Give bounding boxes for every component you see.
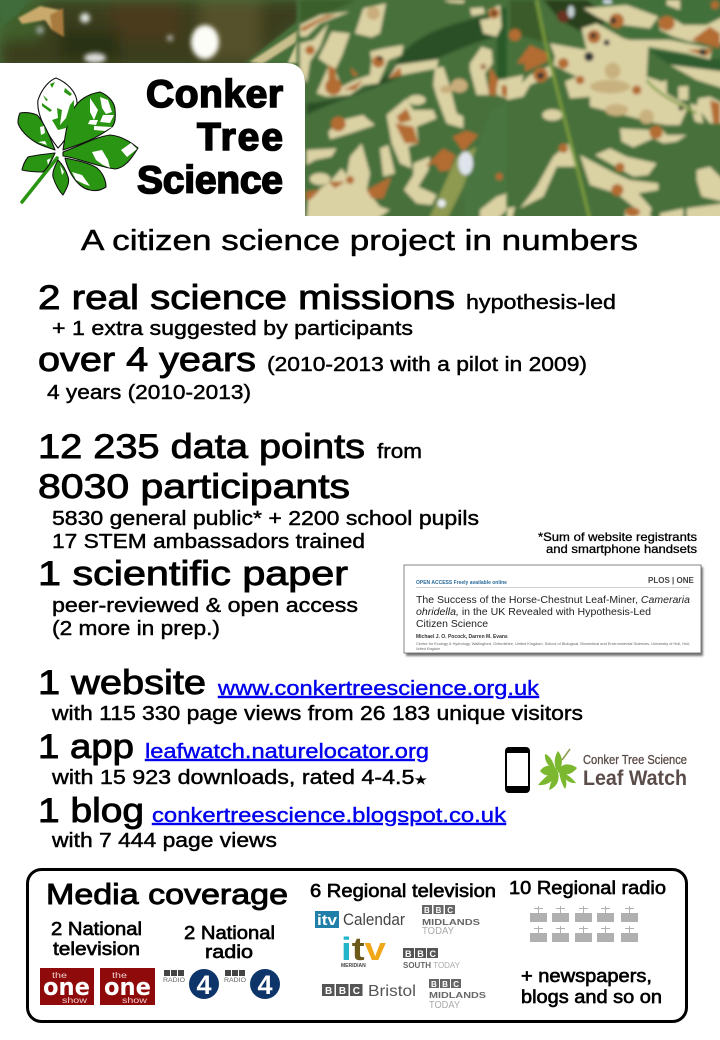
block: website: 1 website bbox=[38, 664, 206, 702]
paper thumbnail: Citizen Science bbox=[416, 619, 488, 630]
title: A citizen science project in numbers bbox=[81, 225, 638, 257]
national television: 2 National bbox=[51, 918, 142, 939]
block: data points and participants: 5830 general public* + 2200 school pupils bbox=[52, 508, 479, 530]
national radio: 4 bbox=[196, 970, 212, 1000]
icon: smartphone bbox=[505, 747, 530, 793]
paper thumbnail: Centre for Ecology & Hydrology, Wallingford, Oxfordshire, United Kingdom, School of Biological, Biomedical and Environmental Sciences, University of Hull, Hull, bbox=[416, 642, 690, 646]
newspapers and blogs note: + newspapers, bbox=[521, 965, 652, 986]
block: data points and participants bbox=[38, 428, 479, 553]
logo panel bbox=[0, 63, 305, 216]
logo wordmark: Conker bbox=[146, 73, 283, 116]
block: years bbox=[38, 341, 587, 404]
block: website: www.conkertreescience.org.uk bbox=[217, 678, 540, 700]
national television: show bbox=[62, 995, 88, 1005]
regional television: SOUTH TODAY bbox=[403, 960, 460, 970]
block: scientific paper: peer-reviewed & open access bbox=[52, 595, 358, 617]
block: data points and participants: from bbox=[377, 441, 422, 463]
block: blog: with 7 444 page views bbox=[51, 830, 277, 852]
logo wordmark: Tree bbox=[197, 116, 283, 159]
national radio bbox=[163, 922, 280, 1000]
regional television: B B C bbox=[431, 980, 459, 989]
block: years: (2010-2013 with a pilot in 2009) bbox=[267, 354, 587, 376]
panel: media coverage bbox=[28, 870, 686, 1022]
footnote bbox=[538, 530, 697, 556]
national radio: 2 National bbox=[184, 922, 275, 943]
regional television: MERIDIAN bbox=[341, 963, 366, 969]
paper thumbnail: OPEN ACCESS Freely available online bbox=[416, 580, 507, 586]
leaf blotches, right tile bbox=[507, 0, 720, 220]
regional television: Bristol bbox=[368, 983, 416, 1000]
national television: the bbox=[52, 970, 67, 980]
regional television: B B C bbox=[424, 906, 453, 915]
block: data points and participants: 12 235 data points bbox=[38, 428, 365, 466]
regional television: MIDLANDS bbox=[422, 917, 480, 927]
regional television: Calendar bbox=[343, 910, 405, 929]
regional television: TODAY bbox=[429, 1000, 460, 1011]
national television: show bbox=[122, 995, 148, 1005]
national radio: radio bbox=[205, 941, 253, 962]
leaf watch logo: Leaf Watch bbox=[583, 767, 687, 790]
national radio: RADIO bbox=[224, 977, 246, 984]
regional television: MIDLANDS bbox=[429, 990, 486, 1000]
logo wordmark: Science bbox=[137, 159, 283, 202]
block: blog: conkertreescience.blogspot.co.uk bbox=[152, 805, 507, 827]
newspapers and blogs note bbox=[521, 965, 662, 1007]
header photo: leaves with leaf-miner damage bbox=[0, 0, 720, 220]
block: science missions bbox=[38, 279, 616, 340]
footnote: and smartphone handsets bbox=[546, 542, 697, 556]
paper thumbnail: ohridella, in the UK Revealed with Hypothesis-Led bbox=[416, 607, 651, 618]
block: blog: 1 blog bbox=[38, 792, 144, 830]
paper thumbnail: PLOS | ONE bbox=[648, 576, 694, 585]
national television: the bbox=[112, 970, 127, 980]
block: blog bbox=[38, 792, 507, 852]
block: app bbox=[38, 728, 429, 789]
block: science missions: hypothesis-led bbox=[466, 292, 616, 314]
block: years: over 4 years bbox=[38, 341, 256, 379]
regional television: 6 Regional television bbox=[310, 880, 496, 901]
regional radio bbox=[509, 877, 666, 942]
footnote: *Sum of website registrants bbox=[538, 530, 697, 544]
block: app: with 15 923 downloads, rated 4-4.5 ★ bbox=[51, 767, 427, 789]
regional television bbox=[310, 880, 496, 1011]
paper thumbnail: United Kingdom bbox=[416, 647, 440, 651]
newspapers and blogs note: blogs and so on bbox=[521, 986, 662, 1007]
national radio: RADIO bbox=[163, 977, 185, 984]
block: years: 4 years (2010-2013) bbox=[47, 382, 251, 404]
regional television: TODAY bbox=[422, 926, 454, 937]
national television bbox=[40, 918, 155, 1005]
block: website bbox=[38, 664, 583, 725]
leaf watch logo bbox=[538, 749, 687, 790]
block: data points and participants: 17 STEM ambassadors trained bbox=[52, 531, 365, 553]
block: science missions: 2 real science missions bbox=[38, 279, 455, 317]
paper thumbnail: The Success of the Horse-Chestnut Leaf-Miner, Cameraria bbox=[416, 595, 690, 606]
paper thumbnail: Michael J. O. Pocock, Darren M. Evans bbox=[416, 634, 508, 640]
national television: television bbox=[53, 938, 140, 959]
block: scientific paper: 1 scientific paper bbox=[38, 555, 348, 593]
regional television: itv bbox=[341, 931, 386, 967]
leaf blotches, left tile bbox=[297, 0, 513, 220]
block: data points and participants: 8030 participants bbox=[38, 468, 350, 506]
national radio: 4 bbox=[257, 970, 273, 1000]
block: app: 1 app bbox=[38, 728, 134, 766]
block: scientific paper bbox=[38, 555, 358, 640]
regional radio: 10 Regional radio bbox=[509, 877, 666, 898]
icon: conker leaf bbox=[18, 78, 138, 202]
regional television: itv bbox=[317, 912, 338, 929]
paper thumbnail bbox=[404, 565, 703, 656]
regional television: B B C bbox=[405, 949, 436, 959]
regional television: B B C bbox=[325, 986, 360, 997]
national television: one bbox=[43, 973, 90, 1001]
media coverage heading: Media coverage bbox=[46, 879, 288, 911]
block: website: with 115 330 page views from 26 183 unique visitors bbox=[51, 703, 583, 725]
leaf watch logo: Conker Tree Science bbox=[583, 753, 687, 767]
block: science missions: + 1 extra suggested by participants bbox=[52, 318, 413, 340]
national television: one bbox=[104, 973, 151, 1001]
block: scientific paper: (2 more in prep.) bbox=[52, 618, 220, 640]
logo wordmark bbox=[137, 73, 283, 202]
block: app: leafwatch.naturelocator.org bbox=[145, 741, 429, 763]
